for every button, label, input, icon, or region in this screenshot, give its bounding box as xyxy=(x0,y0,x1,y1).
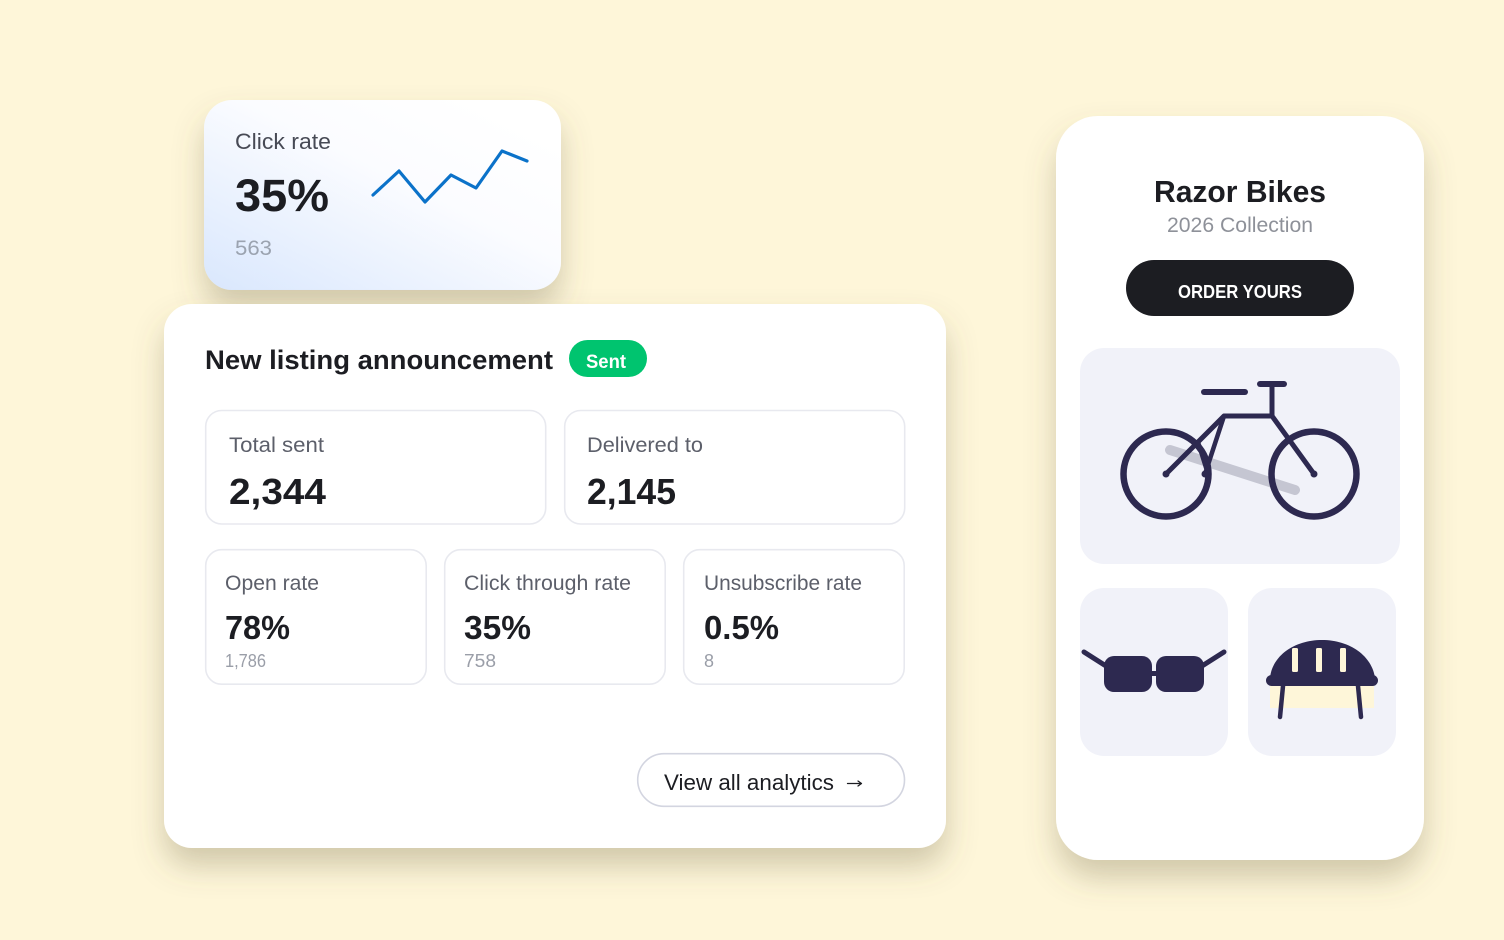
icon: sunglasses xyxy=(1084,652,1224,692)
stat: unsubscribe rate: 8 xyxy=(704,650,714,671)
stat: delivered to xyxy=(565,410,905,524)
stat: open rate xyxy=(206,550,426,684)
button: order yours xyxy=(1126,260,1354,316)
stat: open rate: 1,786 xyxy=(225,650,266,671)
stat: total sent: Total sent xyxy=(229,434,324,457)
panel: click rate card xyxy=(204,100,561,290)
stat: total sent xyxy=(206,410,546,524)
stat: click through rate xyxy=(445,550,665,684)
stat: delivered to: 2,145 xyxy=(587,471,676,512)
product title: Razor Bikes xyxy=(1154,174,1326,209)
image tile: helmet xyxy=(1248,588,1396,756)
bike ground shadow xyxy=(1170,450,1295,490)
stat: click through rate: 35% xyxy=(464,609,531,646)
line chart: click rate trend xyxy=(373,151,527,202)
stat: open rate: Open rate xyxy=(225,572,319,595)
stat: click through rate: Click through rate xyxy=(464,572,631,595)
stat: click through rate: 758 xyxy=(464,650,496,671)
collection subtitle: 2026 Collection xyxy=(1167,214,1313,237)
stat: delivered to: Delivered to xyxy=(587,434,703,457)
image tile: bicycle xyxy=(1080,348,1400,564)
stat: unsubscribe rate: 0.5% xyxy=(704,609,779,646)
button: view all analytics xyxy=(638,754,904,806)
button: view all analytics: View all analytics xyxy=(664,770,834,795)
icon: bicycle xyxy=(1124,384,1356,516)
panel: phone product page xyxy=(1056,116,1424,860)
click rate value: 35% xyxy=(235,170,329,221)
status badge: sent xyxy=(569,340,647,377)
stat: open rate: 78% xyxy=(225,609,290,646)
stat: unsubscribe rate: Unsubscribe rate xyxy=(704,572,862,595)
image tile: sunglasses xyxy=(1080,588,1228,756)
panel: new listing announcement xyxy=(164,304,946,848)
button: order yours: ORDER YOURS xyxy=(1178,281,1302,302)
heading: New listing announcement xyxy=(205,345,553,375)
stat: unsubscribe rate xyxy=(684,550,904,684)
click count: 563 xyxy=(235,237,272,260)
status badge: sent: Sent xyxy=(586,352,627,373)
icon: arrow xyxy=(848,781,862,786)
click rate label: Click rate xyxy=(235,129,331,154)
stat: total sent: 2,344 xyxy=(229,471,326,512)
cream shadow xyxy=(1270,684,1374,708)
icon: helmet xyxy=(1266,640,1378,717)
